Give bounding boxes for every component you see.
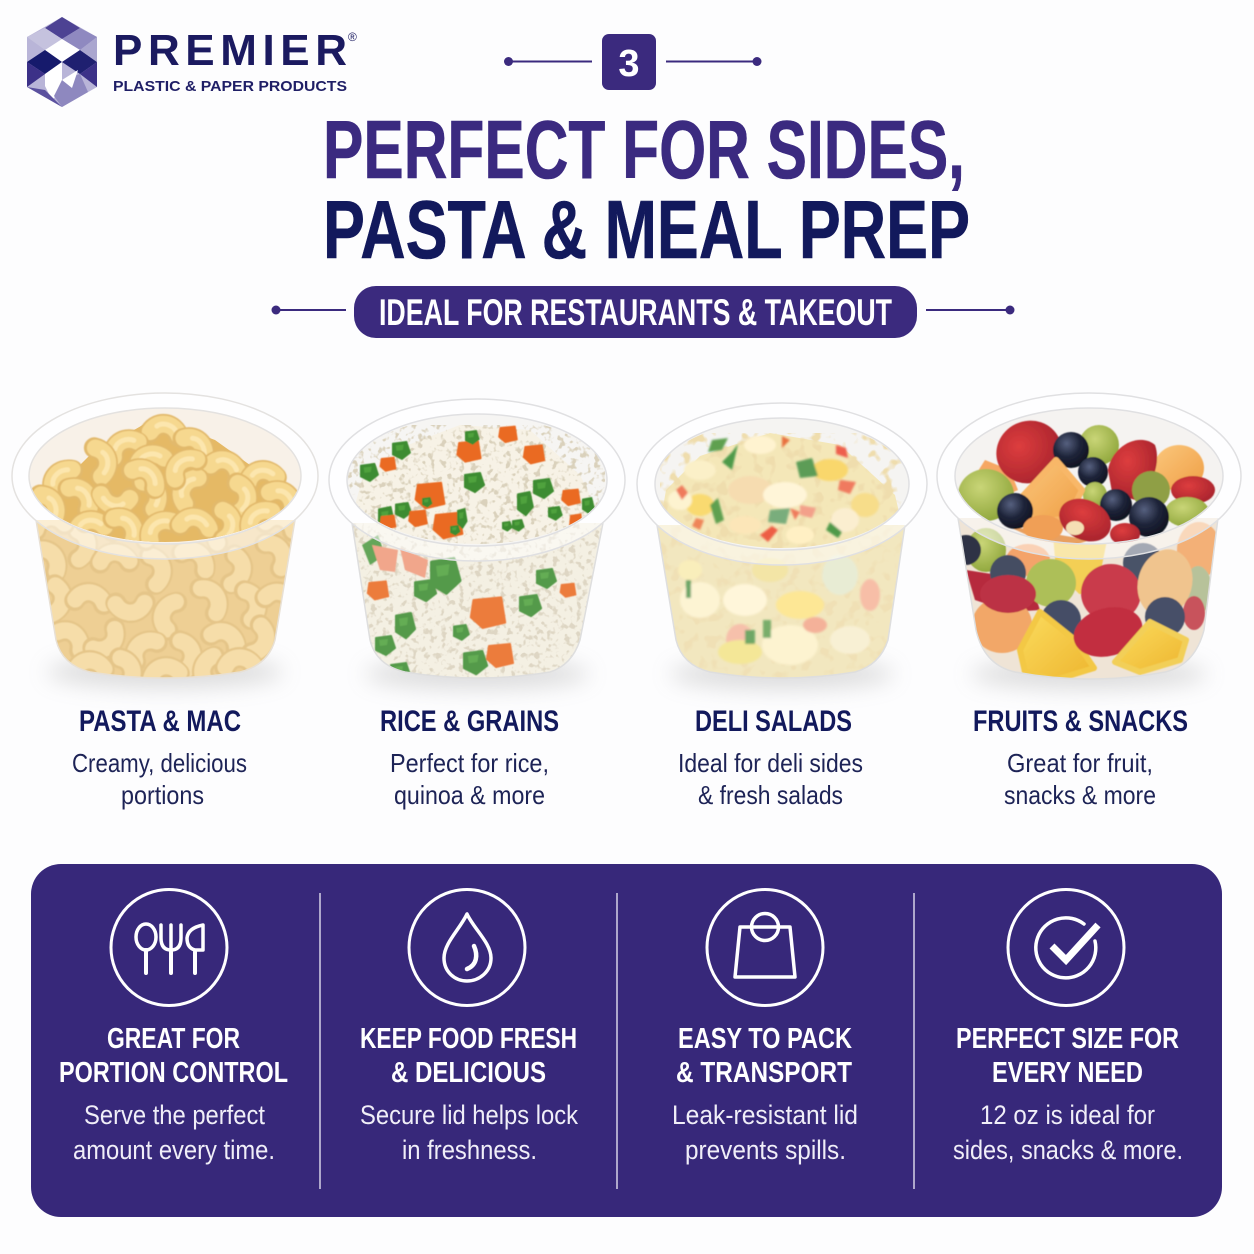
container: rice and grains [329, 399, 625, 689]
benefit: perfect size: sides, snacks & more. [953, 1135, 1183, 1165]
benefit: keep food fresh: Secure lid helps lock [360, 1100, 578, 1130]
caption: fruits and snacks: Great for fruit, [1007, 748, 1153, 778]
caption: rice and grains: RICE & GRAINS [380, 705, 559, 738]
panel: benefits [31, 864, 1222, 1217]
benefit: portion control: amount every time. [73, 1135, 275, 1165]
benefit: perfect size: 12 oz is ideal for [980, 1100, 1155, 1130]
logo [27, 17, 357, 107]
container: fruits and snacks [937, 393, 1241, 689]
benefit: portion control [59, 890, 288, 1165]
caption: fruits and snacks [973, 705, 1188, 810]
caption: rice and grains: quinoa & more [394, 780, 545, 810]
icon: shopping bag [707, 890, 823, 1006]
number badge: 3 [618, 43, 640, 85]
icon: utensils [111, 890, 227, 1006]
benefit: easy to pack: EASY TO PACK [678, 1023, 852, 1055]
benefit: easy to pack: & TRANSPORT [676, 1057, 852, 1089]
benefit: perfect size [953, 890, 1183, 1165]
caption: deli salads: DELI SALADS [695, 705, 852, 738]
caption: deli salads: Ideal for deli sides [678, 748, 863, 778]
caption: rice and grains [380, 705, 559, 810]
benefit: keep food fresh [360, 890, 578, 1165]
benefit: perfect size: PERFECT SIZE FOR [956, 1023, 1179, 1055]
benefit: keep food fresh: in freshness. [402, 1135, 537, 1165]
caption: fruits and snacks: snacks & more [1004, 780, 1156, 810]
title: PASTA & MEAL PREP [323, 183, 970, 276]
benefit: portion control: Serve the perfect [84, 1100, 265, 1130]
caption: deli salads: & fresh salads [698, 780, 843, 810]
caption: pasta and mac [72, 705, 247, 810]
icon: hexagon logo mark [27, 17, 97, 107]
registered mark: ® [348, 30, 357, 44]
caption: pasta and mac: PASTA & MAC [79, 705, 241, 738]
icon: check mark [1008, 890, 1124, 1006]
title [323, 103, 970, 276]
container: deli salads [637, 403, 927, 689]
benefit: easy to pack [672, 890, 858, 1165]
benefit: portion control: PORTION CONTROL [59, 1057, 288, 1089]
subtitle pill [272, 286, 1014, 338]
benefit: keep food fresh: & DELICIOUS [391, 1057, 546, 1089]
benefit: keep food fresh: KEEP FOOD FRESH [360, 1023, 577, 1055]
caption: pasta and mac: Creamy, delicious [72, 748, 247, 778]
benefit: easy to pack: prevents spills. [685, 1135, 846, 1165]
brand name: PREMIER [113, 26, 347, 75]
benefit: portion control: GREAT FOR [107, 1023, 240, 1055]
benefit: easy to pack: Leak-resistant lid [672, 1100, 858, 1130]
caption: rice and grains: Perfect for rice, [390, 748, 549, 778]
caption: pasta and mac: portions [121, 780, 204, 810]
title: PERFECT FOR SIDES, [323, 103, 965, 196]
subtitle pill: IDEAL FOR RESTAURANTS & TAKEOUT [379, 292, 892, 333]
number badge [504, 34, 762, 90]
container: pasta and mac [12, 393, 318, 688]
benefit: perfect size: EVERY NEED [992, 1057, 1143, 1089]
brand tagline: PLASTIC & PAPER PRODUCTS [113, 78, 347, 95]
icon: water drop [409, 890, 525, 1006]
caption: fruits and snacks: FRUITS & SNACKS [973, 705, 1188, 738]
caption: deli salads [678, 705, 863, 810]
